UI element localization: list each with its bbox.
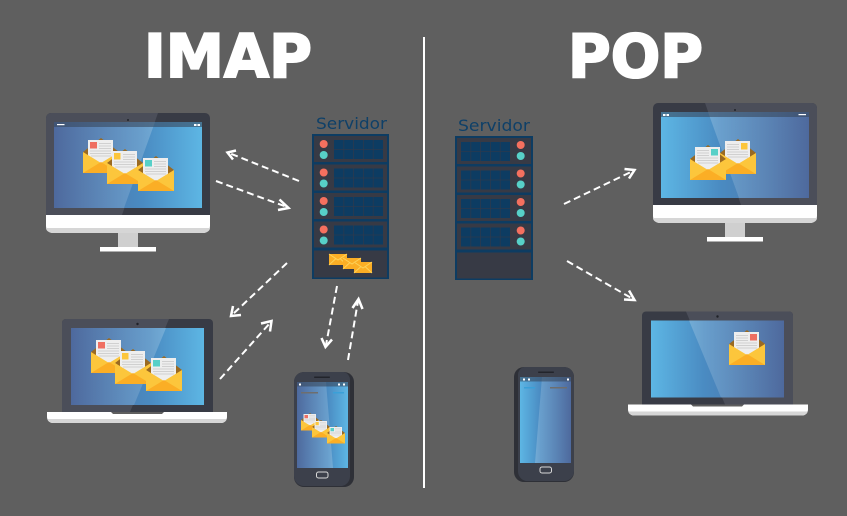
email envelopes: [91, 338, 182, 391]
POP desktop computer with two emails: [653, 103, 817, 242]
server rack: [455, 136, 533, 280]
title: IMAP: IMAP: [144, 22, 312, 92]
IMAP arrows between server and devices: [216, 150, 362, 379]
arrow: desktop to server: [216, 181, 288, 210]
server label: Servidor: [458, 116, 530, 135]
IMAP server: [312, 114, 389, 279]
POP laptop with one email: [628, 312, 808, 416]
email envelopes: [690, 139, 756, 180]
server rack: [312, 134, 389, 279]
IMAP laptop with three emails: [47, 319, 227, 423]
email envelopes: [83, 138, 174, 191]
email envelope: [729, 330, 765, 365]
arrow: phone to server: [348, 299, 362, 360]
IMAP phone with three emails: [294, 372, 354, 487]
title: POP: POP: [568, 22, 703, 92]
server label: Servidor: [316, 114, 387, 133]
arrow: laptop to server: [220, 321, 272, 379]
arrow: server to desktop: [228, 150, 299, 181]
arrow: server to phone: [322, 286, 337, 347]
POP phone without emails: [514, 367, 574, 482]
arrow: server to laptop: [567, 261, 634, 300]
IMAP desktop computer with three emails: [46, 113, 210, 252]
arrow: server to laptop: [231, 263, 287, 316]
arrow: server to desktop: [564, 169, 634, 204]
POP arrows from server to devices: [564, 169, 634, 300]
POP server: [455, 116, 533, 280]
email envelopes: [301, 413, 345, 444]
